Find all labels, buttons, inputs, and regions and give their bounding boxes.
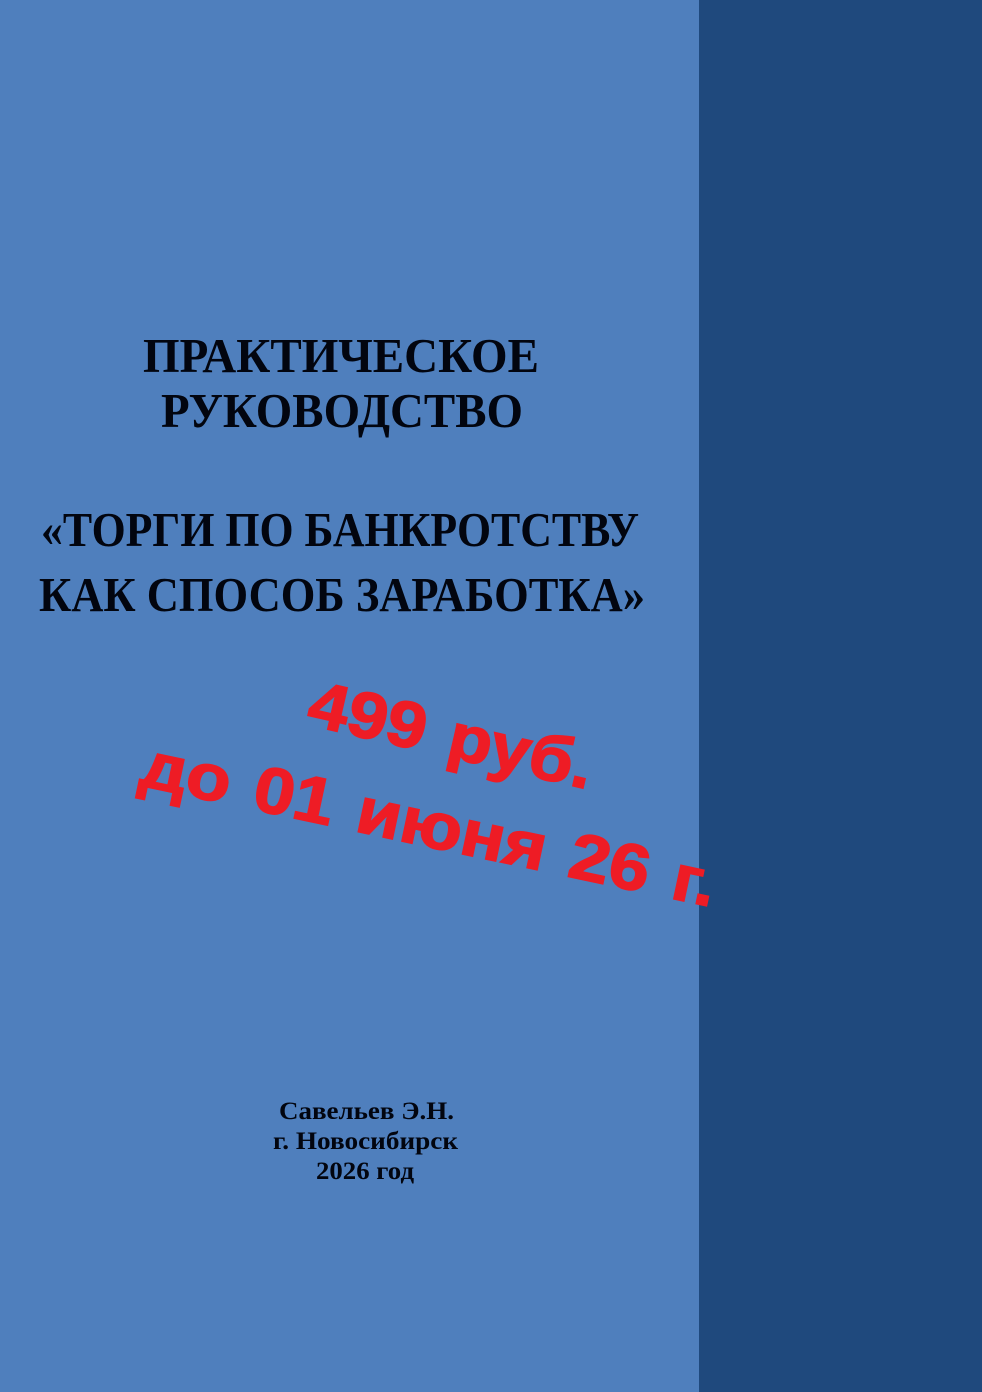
heading: guide name: КАК СПОСОБ ЗАРАБОТКА»: [39, 567, 645, 622]
author block: [273, 1098, 459, 1185]
price callout: rotated red text: [135, 667, 723, 921]
title: practical guide: ПРАКТИЧЕСКОЕ: [143, 328, 539, 383]
heading: guide name: «ТОРГИ ПО БАНКРОТСТВУ: [41, 502, 639, 557]
panel: dark blue side band: [699, 0, 982, 1392]
author block: Савельев Э.Н.: [279, 1098, 454, 1125]
heading: guide name: [39, 502, 645, 622]
author block: г. Новосибирск: [273, 1128, 459, 1155]
title: practical guide: РУКОВОДСТВО: [161, 383, 523, 438]
price callout: rotated red text: 499 руб.: [302, 667, 601, 803]
price callout: rotated red text: до 01 июня 26 г.: [135, 727, 723, 921]
panel: main blue cover: [0, 0, 699, 1392]
author block: 2026 год: [316, 1158, 414, 1185]
title: practical guide: [143, 328, 539, 438]
